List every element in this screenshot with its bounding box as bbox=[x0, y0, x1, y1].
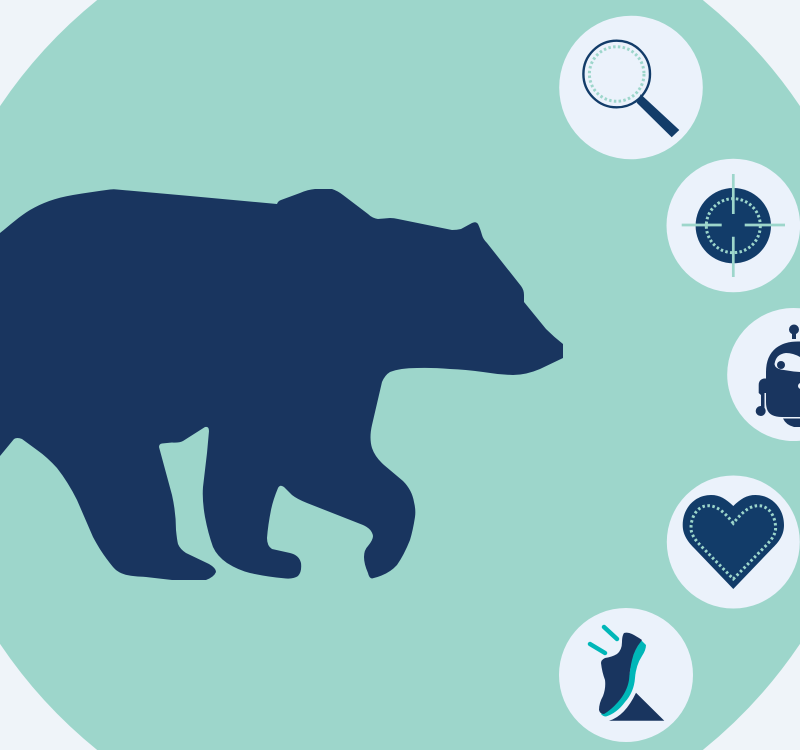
icon: target crosshair bbox=[666, 159, 800, 292]
icon: heart bbox=[667, 476, 800, 608]
bear silhouette bbox=[0, 189, 563, 580]
icon: running shoe bbox=[559, 608, 693, 742]
icon: robot bbox=[727, 308, 800, 441]
icon: magnifying glass bbox=[559, 16, 703, 159]
